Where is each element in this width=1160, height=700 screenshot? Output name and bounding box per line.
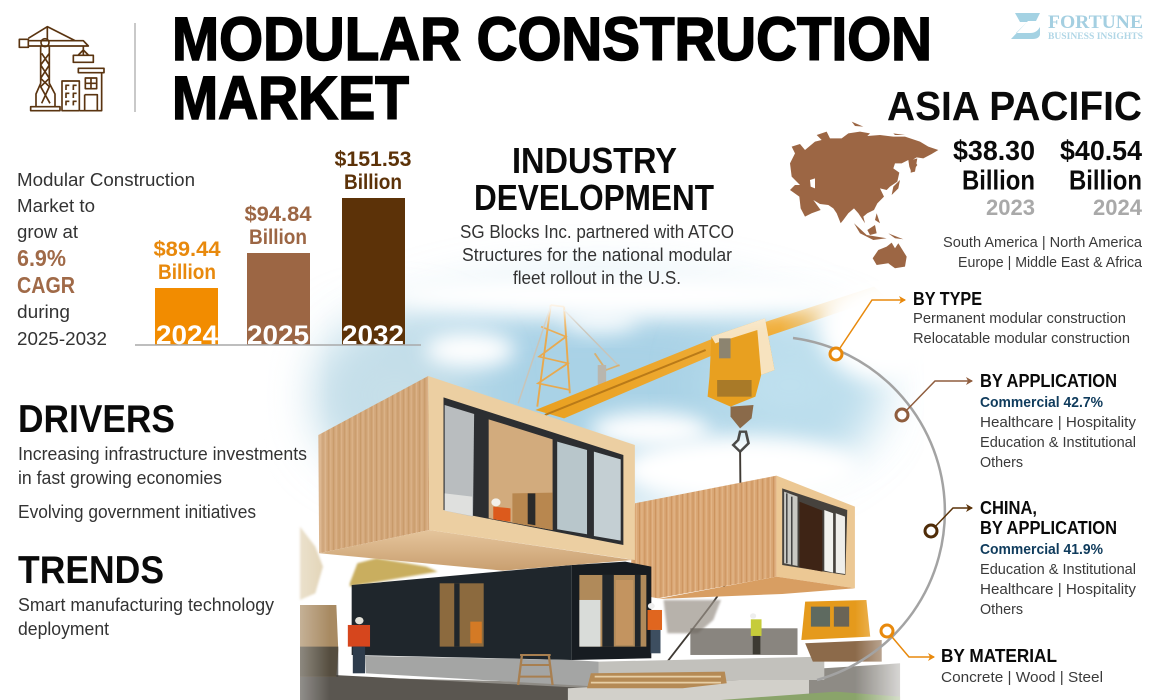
crane head	[708, 318, 775, 407]
bar chart: $89.44	[154, 238, 221, 261]
segment: China by application: Healthcare | Hospitality	[980, 581, 1137, 598]
segment: by type: Permanent modular construction	[913, 310, 1126, 327]
bar chart: $151.53	[334, 148, 412, 171]
segment: China by application: BY APPLICATION	[980, 518, 1117, 538]
growth text: Modular Construction	[17, 170, 195, 190]
industry development	[460, 140, 734, 288]
value 2024	[1060, 135, 1143, 220]
trends: TRENDS	[18, 549, 164, 592]
value 2024: Billion	[1069, 164, 1142, 196]
loader	[801, 600, 882, 662]
segment arc with connectors	[793, 300, 972, 680]
bar chart: 2025	[247, 320, 309, 350]
value 2024: $40.54	[1060, 135, 1142, 166]
fence and distant site	[690, 628, 798, 655]
right timber module	[629, 476, 855, 599]
segment: China by application: CHINA,	[980, 498, 1037, 518]
segment: China by application: Others	[980, 601, 1023, 618]
trends	[18, 549, 274, 639]
industry development: fleet rollout in the U.S.	[513, 268, 681, 288]
segment: by type: Relocatable modular construction	[913, 330, 1130, 347]
industry development: SG Blocks Inc. partnered with ATCO	[460, 222, 734, 242]
bar chart: Billion	[158, 261, 216, 284]
logo: Fortune Business Insights	[1011, 12, 1143, 42]
crane boom	[535, 287, 886, 418]
segment: by application: BY APPLICATION	[980, 371, 1117, 391]
value 2023: Billion	[962, 164, 1035, 196]
drivers: DRIVERS	[18, 398, 175, 441]
segment: by application: Healthcare | Hospitality	[980, 414, 1137, 431]
other regions: Europe | Middle East & Africa	[958, 254, 1143, 271]
drivers: Increasing infrastructure investments	[18, 444, 307, 464]
black module	[352, 562, 824, 687]
segment: China by application: Education & Institutional	[980, 561, 1136, 578]
title: MODULAR CONSTRUCTION	[172, 5, 932, 73]
growth text: CAGR	[17, 272, 75, 298]
industry development: DEVELOPMENT	[474, 177, 714, 218]
trends: deployment	[18, 619, 109, 639]
bar chart: Billion	[344, 171, 402, 194]
excavator	[300, 605, 338, 677]
ground	[300, 663, 900, 700]
big timber module	[318, 376, 635, 571]
value 2024: 2024	[1093, 195, 1143, 220]
title	[172, 5, 932, 132]
drivers: Evolving government initiatives	[18, 502, 256, 522]
background trees	[350, 558, 438, 587]
lattice tower crane	[518, 305, 620, 407]
growth text: grow at	[17, 222, 78, 242]
icon: crane and buildings	[19, 27, 104, 111]
segment: by material: Concrete | Wood | Steel	[941, 669, 1103, 686]
workers	[348, 603, 762, 673]
segment: by application: Others	[980, 454, 1023, 471]
bar chart	[135, 148, 421, 350]
lumber stack	[587, 672, 727, 688]
industry development: Structures for the national modular	[462, 245, 732, 265]
growth text: 2025-2032	[17, 329, 107, 349]
segment: China by application: Commercial 41.9%	[980, 541, 1103, 558]
growth text: 6.9%	[17, 245, 66, 271]
drivers	[18, 398, 307, 522]
photo: modular building lifted by crane	[200, 273, 984, 700]
bar chart: Billion	[249, 226, 307, 249]
Asia Pacific values	[953, 135, 1143, 220]
segment: by material: BY MATERIAL	[941, 646, 1057, 666]
industry development: INDUSTRY	[512, 140, 677, 181]
bar chart: 2024	[156, 320, 218, 350]
drivers: in fast growing economies	[18, 468, 222, 488]
other regions: South America | North America	[943, 234, 1143, 251]
map: Asia Pacific	[790, 122, 938, 268]
value 2023: $38.30	[953, 135, 1035, 166]
segment: by type	[913, 289, 1130, 347]
segment: China by application	[980, 498, 1137, 618]
growth text	[17, 170, 195, 349]
trends: Smart manufacturing technology	[18, 595, 274, 615]
other regions	[943, 234, 1143, 271]
growth text: Market to	[17, 196, 95, 216]
segment: by type: BY TYPE	[913, 289, 982, 309]
value 2023	[953, 135, 1035, 220]
heading: Asia Pacific: ASIA PACIFIC	[887, 83, 1142, 129]
segment: by material	[941, 646, 1103, 686]
ladder	[518, 655, 553, 685]
value 2023: 2023	[986, 195, 1035, 220]
left foreground tree	[300, 527, 323, 600]
growth text: during	[17, 302, 70, 322]
segment: by application: Education & Institutional	[980, 434, 1136, 451]
crane cable	[667, 452, 741, 662]
logo: Fortune Business Insights: FORTUNE	[1048, 12, 1143, 33]
segment: by application: Commercial 42.7%	[980, 394, 1103, 411]
bar chart: 2032	[342, 320, 404, 350]
logo: Fortune Business Insights: BUSINESS INSIGHTS	[1048, 32, 1143, 42]
title: MARKET	[172, 64, 409, 132]
bar chart: $94.84	[244, 203, 312, 226]
photo edge fades	[200, 273, 984, 700]
segment: by application	[980, 371, 1137, 471]
